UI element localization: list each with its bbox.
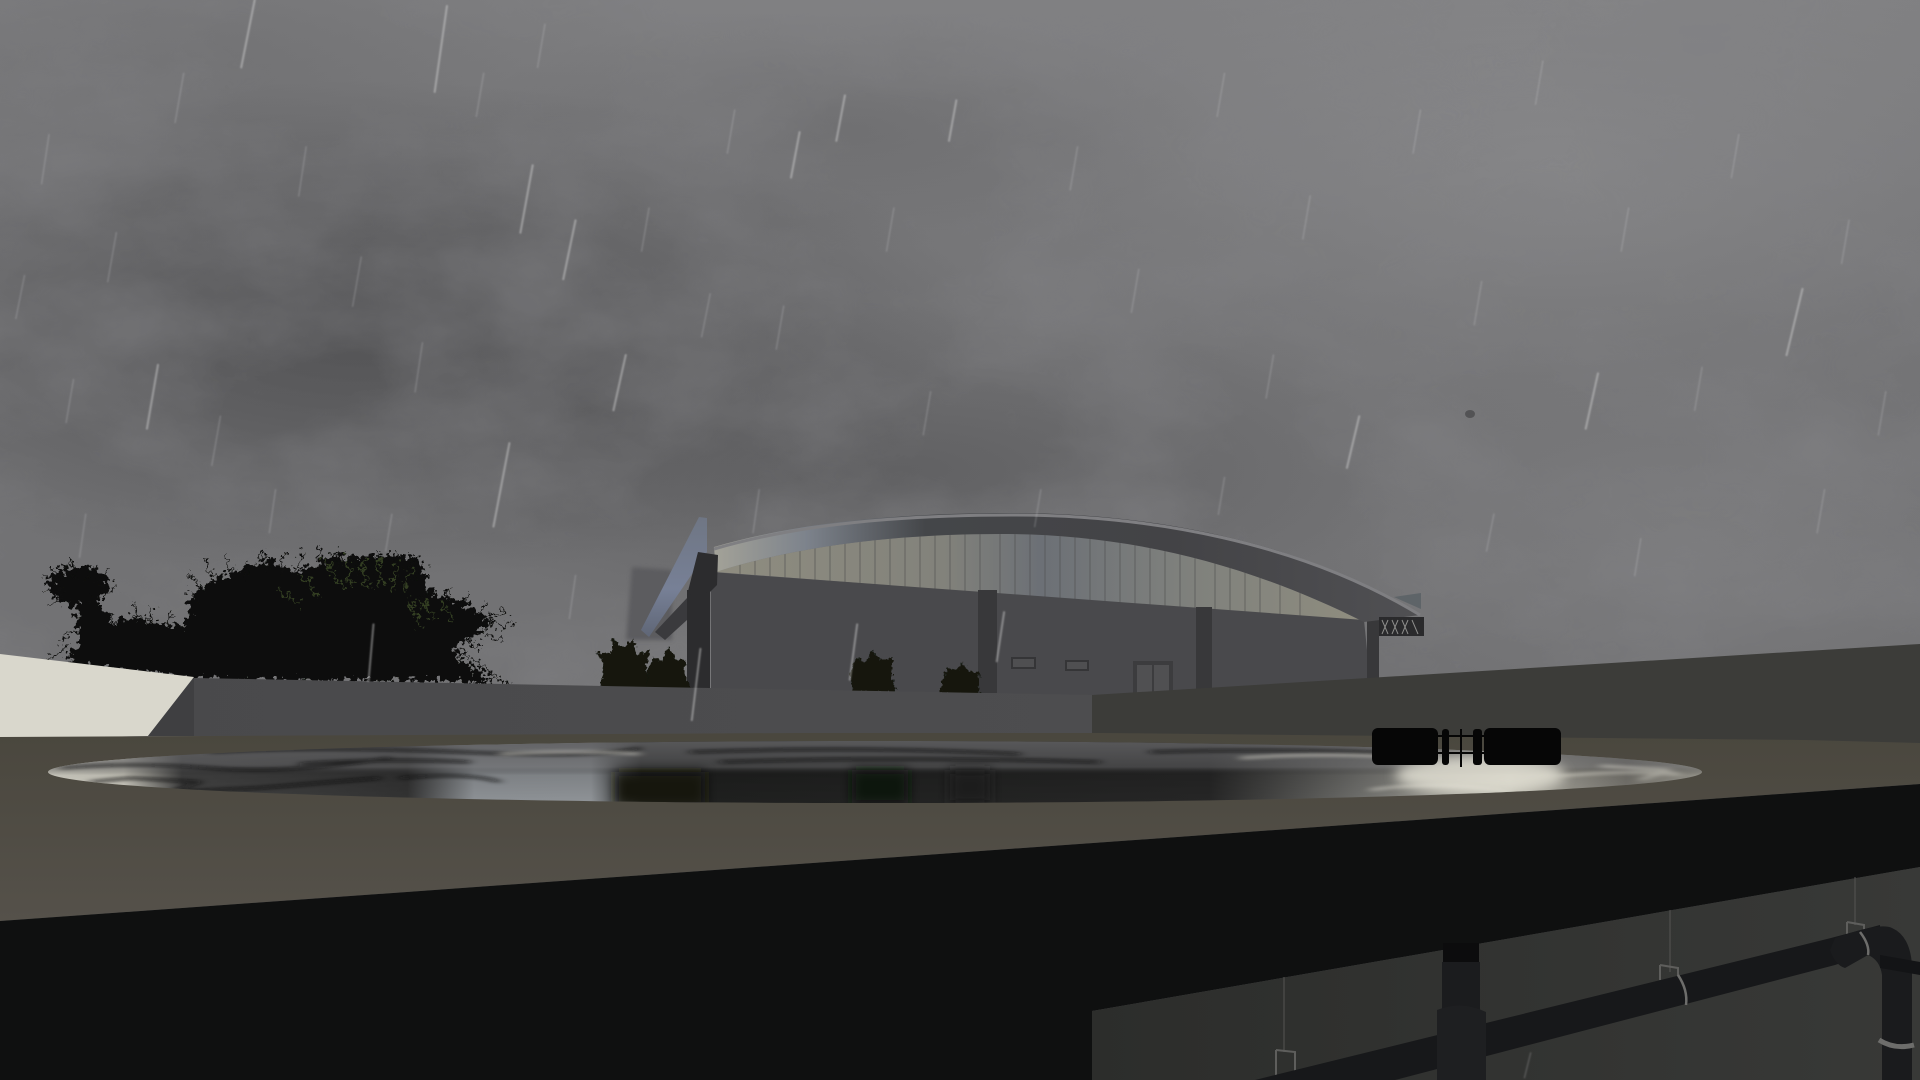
metal cladding	[718, 534, 1358, 620]
left steel column	[655, 552, 718, 690]
sunlit cream wedge	[0, 654, 194, 739]
pipe straps	[1678, 932, 1914, 1047]
underside wall	[1092, 867, 1920, 1080]
tree and building reflections	[615, 770, 990, 806]
dark wall columns	[978, 590, 1379, 693]
left parapet wall	[148, 678, 1092, 736]
foliage twigs	[42, 548, 512, 684]
wedge shadow	[148, 677, 194, 736]
right roof triangle	[1394, 593, 1421, 609]
water pool	[48, 741, 1702, 803]
pipe elbow and downpipe	[1830, 926, 1912, 1080]
hanger brackets	[1276, 922, 1864, 1080]
horizontal pipe	[1255, 925, 1880, 1080]
door	[1133, 661, 1173, 695]
roof top highlight	[714, 515, 1420, 615]
vertical pipe	[1443, 943, 1479, 1007]
curved roof fascia	[714, 513, 1420, 622]
roof truss	[1379, 617, 1424, 636]
parapet walls	[0, 644, 1920, 745]
planting along the wall	[596, 638, 980, 694]
main wall	[711, 572, 1372, 700]
stormy sky	[0, 0, 1920, 760]
left fin	[641, 517, 707, 637]
tree cluster	[42, 548, 512, 684]
windows	[1012, 658, 1088, 670]
branch pipe	[1880, 955, 1920, 975]
hanger rods	[1284, 877, 1855, 1052]
drain pipes	[1255, 877, 1920, 1080]
sunlit foliage	[280, 556, 452, 626]
pipe collar	[1437, 1005, 1486, 1080]
rear block	[626, 567, 672, 640]
building	[626, 513, 1424, 700]
bright reflection below the drain	[1395, 755, 1565, 795]
roof drain fixture	[1372, 728, 1561, 767]
ripples	[60, 748, 1400, 792]
roof deck	[0, 733, 1920, 921]
right parapet wall	[1092, 644, 1920, 745]
concrete slab edge	[0, 784, 1920, 1080]
